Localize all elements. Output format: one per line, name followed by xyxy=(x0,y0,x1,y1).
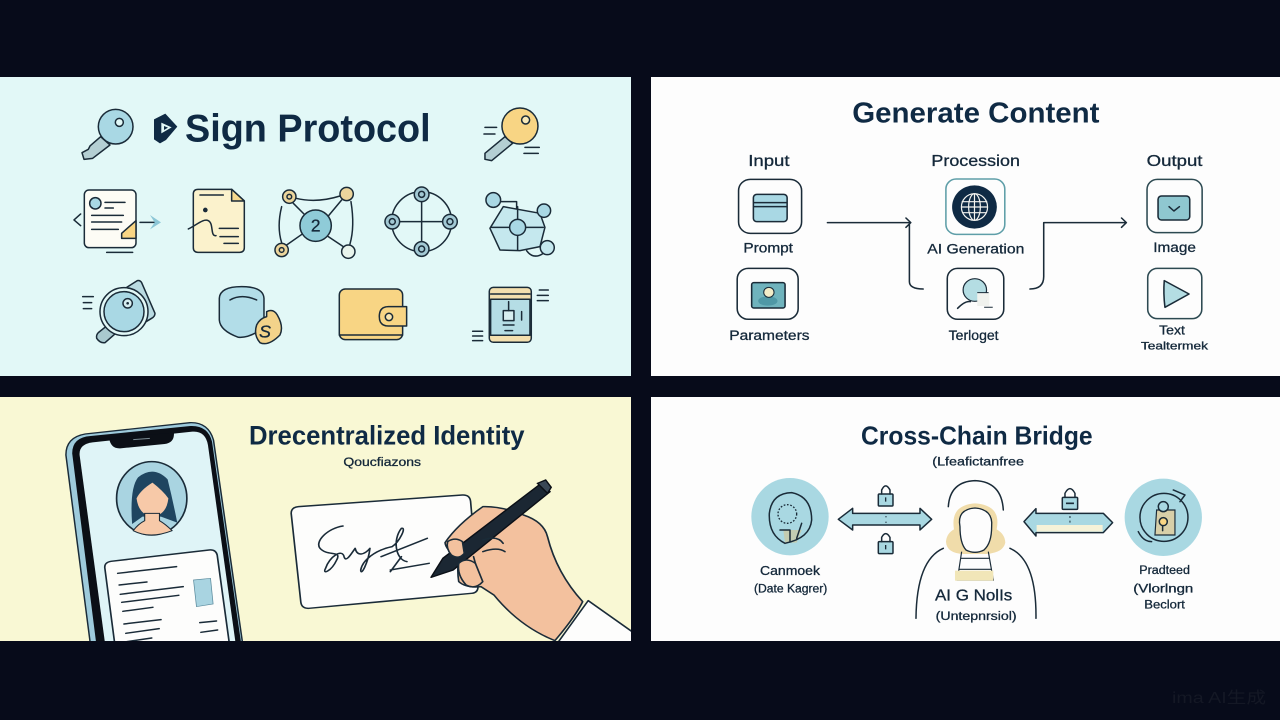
icon: document with arrows xyxy=(74,190,161,252)
node: terloget: Terloget xyxy=(949,328,999,344)
shirt cuff xyxy=(558,600,631,641)
panel: decentralized identity xyxy=(0,397,634,647)
panel: generate content xyxy=(651,77,1280,376)
panel: sign protocol xyxy=(0,77,631,376)
node: central ai figure: AI G NolIs xyxy=(935,588,1013,605)
heading: decentralized identity: Drecentralized Identity xyxy=(249,421,525,450)
icon: ring network xyxy=(385,187,457,256)
identity card xyxy=(105,550,230,647)
column label: input: Input xyxy=(748,152,790,170)
icon: token pouch with coin bag xyxy=(219,287,281,344)
node: image: Image xyxy=(1153,240,1196,256)
node: central ai figure xyxy=(916,481,1036,623)
node: right chain: (Vlorlngn xyxy=(1133,581,1193,595)
arrow: processing to output xyxy=(1030,218,1126,289)
arrow: right bridge with lock xyxy=(1024,489,1113,536)
node: left chain: (Date Kagrer) xyxy=(754,581,827,595)
subheading: (Lfeafictanfree xyxy=(932,454,1024,468)
node: terloget xyxy=(947,268,1004,344)
node: left chain xyxy=(751,478,829,595)
node: ai generation xyxy=(927,179,1024,257)
arrow: left bridge with locks xyxy=(838,486,932,554)
heading: sign protocol logo xyxy=(154,114,177,143)
icon: hub network: 2 xyxy=(311,216,320,236)
node: parameters: Parameters xyxy=(729,328,810,344)
icon: polygon network xyxy=(486,193,554,256)
column label: procession: Procession xyxy=(931,152,1020,170)
avatar xyxy=(117,462,187,535)
node: text xyxy=(1141,268,1209,352)
heading: generate content: Generate Content xyxy=(852,98,1100,130)
panel: cross-chain bridge xyxy=(651,397,1280,641)
node: central ai figure: (Untepnrsiol) xyxy=(936,609,1017,623)
node: parameters xyxy=(729,268,810,344)
node: right chain: Pradteed xyxy=(1139,563,1190,577)
icon: yellow key xyxy=(484,108,539,161)
icon: magnifier over card xyxy=(83,281,155,343)
node: right chain: Beclort xyxy=(1144,597,1186,611)
node: right chain xyxy=(1125,479,1202,611)
icon: token pouch with coin bag: S xyxy=(259,321,271,341)
arrow: input to processing xyxy=(827,218,923,289)
icon: signed contract xyxy=(188,189,244,252)
subheading: Qoucfiazons xyxy=(343,456,421,469)
heading: sign protocol: Sign Protocol xyxy=(185,107,431,151)
icon: tablet with lock xyxy=(473,287,548,342)
phone xyxy=(66,423,243,647)
node: image xyxy=(1147,179,1202,256)
icon: blue key xyxy=(82,109,133,159)
watermark: ima AI生成 xyxy=(1172,689,1266,707)
node: prompt: Prompt xyxy=(743,241,793,257)
column label: output: Output xyxy=(1147,152,1203,170)
hand with pen xyxy=(431,480,583,641)
node: ai generation: AI Generation xyxy=(927,242,1024,257)
node: text: Text xyxy=(1159,323,1185,337)
signature card xyxy=(291,495,478,608)
node: prompt xyxy=(739,179,802,257)
icon: hub network xyxy=(275,187,355,258)
heading: cross-chain bridge: Cross-Chain Bridge xyxy=(861,420,1093,450)
icon: wallet xyxy=(339,289,407,340)
node: text: Tealtermek xyxy=(1141,340,1209,352)
node: left chain: Canmoek xyxy=(760,564,821,578)
